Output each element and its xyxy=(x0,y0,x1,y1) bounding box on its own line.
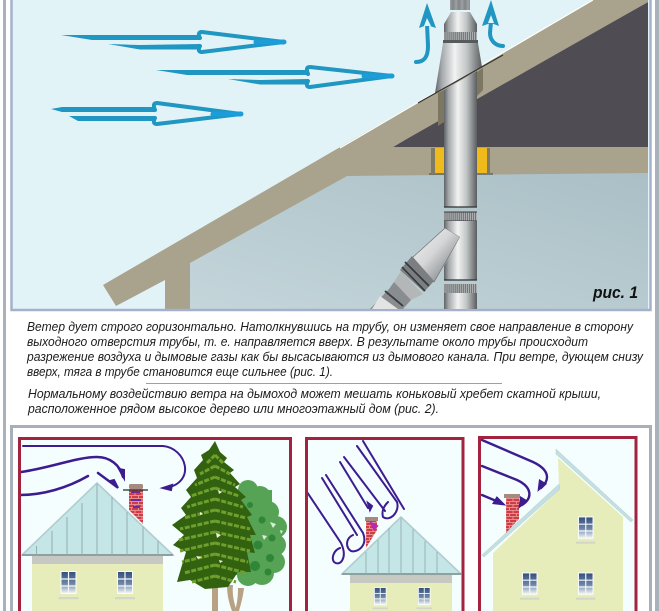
house 2 roof xyxy=(342,517,461,575)
house 1 chimney xyxy=(123,484,148,524)
roof flashing cone xyxy=(435,43,482,93)
text block: wind explanation: Ветер дует строго горизонтально. Натолкнувшись на трубу, он изменяет свое направление в сторону xyxy=(27,320,634,334)
house 1 wall xyxy=(32,564,163,611)
building wall xyxy=(493,458,623,611)
text block: wind explanation xyxy=(26,320,644,379)
fir tree xyxy=(172,441,256,589)
house 2 eaves xyxy=(350,574,452,583)
insulation sleeve xyxy=(429,148,493,174)
wind paths around tree xyxy=(20,446,185,495)
pipe cap xyxy=(443,0,478,43)
wind arrow rising left of pipe xyxy=(416,3,436,62)
red frames xyxy=(20,438,636,611)
building roof strips xyxy=(482,449,633,557)
text block: wind explanation: вверх, тяга в трубе становится еще сильнее (рис. 1). xyxy=(27,365,333,379)
wind arrow 1 xyxy=(61,32,284,52)
scene: tall building beside house xyxy=(482,440,633,611)
attic dark space xyxy=(393,2,648,147)
house 2 windows xyxy=(372,587,432,609)
wind arrow 2 xyxy=(156,67,392,87)
house 2 chimney xyxy=(366,521,377,548)
house 1 eaves xyxy=(32,555,163,564)
text block: obstacles: Нормальному воздействию ветра на дымоход может мешать коньковый хребет скатной крыши, xyxy=(28,387,601,401)
house 1 roof xyxy=(22,483,173,556)
text block: obstacles: расположенное рядом высокое дерево или многоэтажный дом (рис. 2). xyxy=(27,402,439,416)
building chimney xyxy=(504,494,520,533)
house 2 wall xyxy=(350,583,452,611)
lower pipe sections xyxy=(444,212,477,221)
scene: house below ridge xyxy=(307,441,461,611)
wind paths blocked by wall xyxy=(482,440,547,506)
frame borders xyxy=(12,0,650,310)
scene: house and tree xyxy=(20,441,287,611)
pipe shadow on roof xyxy=(438,68,483,126)
wind arrow 3 xyxy=(51,103,241,124)
house 1 windows xyxy=(58,571,135,599)
ceiling background xyxy=(190,173,648,309)
text block: obstacles xyxy=(27,387,601,416)
elbow branch xyxy=(370,228,460,309)
tree trunks xyxy=(212,585,244,611)
figure 1 caption: рис. 1 xyxy=(592,284,638,302)
upper pipe section xyxy=(444,71,477,207)
wind arrow rising right of pipe xyxy=(482,0,503,46)
text block: wind explanation: выходного отверстия трубы, т. е. направляется вверх. В результате около трубы происходит xyxy=(27,335,588,349)
wind paths falling over ridge xyxy=(307,441,404,563)
round tree xyxy=(236,480,287,586)
roof slope and ceiling beam xyxy=(103,0,648,309)
building windows xyxy=(520,516,595,600)
separator line xyxy=(146,383,502,384)
chimney pipe xyxy=(418,0,503,309)
text block: wind explanation: разрежение воздуха и дымовые газы как бы высасываются из дымового канала. При ветре, дующем снизу xyxy=(26,350,644,364)
panel: figure 2 obstacles xyxy=(11,425,651,611)
